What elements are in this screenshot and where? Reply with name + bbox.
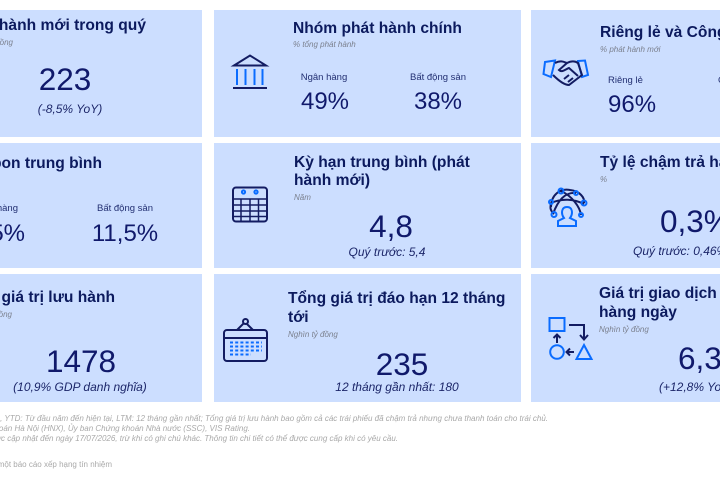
icon: shapes flow bbox=[550, 318, 592, 359]
heading: average tenor second line: hành mới) bbox=[294, 172, 370, 189]
unit: percent: % bbox=[600, 175, 607, 184]
panel: outstanding value bbox=[0, 274, 202, 402]
panel: maturities next 12 months bbox=[214, 274, 521, 402]
value: private share: 96% bbox=[608, 91, 656, 118]
label: banks: Ngân hàng bbox=[301, 72, 347, 83]
value: 4,8: 4,8 bbox=[369, 208, 413, 244]
panel: average coupon bbox=[0, 143, 202, 268]
unit: maturities: Nghìn tỷ đồng bbox=[288, 330, 338, 339]
unit: issuer groups: % tổng phát hành bbox=[293, 40, 356, 49]
label: real estate: Bất động sản bbox=[97, 203, 153, 214]
footnotes bbox=[0, 414, 548, 469]
note: last 12 months: 12 tháng gần nhất: 180 bbox=[335, 380, 459, 394]
label: private: Riêng lẻ bbox=[608, 75, 643, 86]
heading: maturities second line: tới bbox=[288, 309, 309, 326]
panel: daily trading value bbox=[531, 274, 720, 402]
note: previous quarter: Quý trước: 5,4 bbox=[349, 245, 426, 259]
heading: maturities: Tổng giá trị đáo hạn 12 tháng bbox=[288, 289, 505, 307]
value: 223: 223 bbox=[39, 61, 91, 97]
heading: issuer groups: Nhóm phát hành chính bbox=[293, 20, 462, 37]
icon: handshake bbox=[544, 60, 588, 85]
value: real estate coupon: 11,5% bbox=[92, 220, 158, 247]
unit: daily trading value: Nghìn tỷ đồng bbox=[599, 325, 649, 334]
value: real estate share: 38% bbox=[414, 88, 462, 115]
icon: wall calendar bbox=[224, 319, 267, 361]
note: share of GDP: (10,9% GDP danh nghĩa) bbox=[13, 380, 147, 394]
heading: average tenor: Kỳ hạn trung bình (phát bbox=[294, 154, 470, 171]
value: banks share: 49% bbox=[301, 88, 349, 115]
heading: daily trading second line: hàng ngày bbox=[599, 304, 677, 321]
icon: calendar bbox=[233, 188, 267, 222]
value: 1478: 1478 bbox=[46, 343, 116, 379]
panel: average tenor bbox=[214, 143, 521, 268]
unit: private and public: % phát hành mới bbox=[600, 45, 661, 54]
panel: new issuance in quarter bbox=[0, 10, 202, 137]
icon: bank building bbox=[233, 56, 267, 88]
note: YoY change: (-8,5% YoY) bbox=[38, 102, 102, 116]
label: real estate: Bất động sản bbox=[410, 72, 466, 83]
panel: default rate bbox=[531, 143, 720, 268]
unit: years: Năm bbox=[294, 193, 311, 202]
value: 235: 235 bbox=[376, 346, 428, 382]
panel: main issuer groups bbox=[214, 10, 521, 137]
icon: network of people bbox=[549, 188, 586, 226]
panel: private and public placement bbox=[531, 10, 720, 137]
